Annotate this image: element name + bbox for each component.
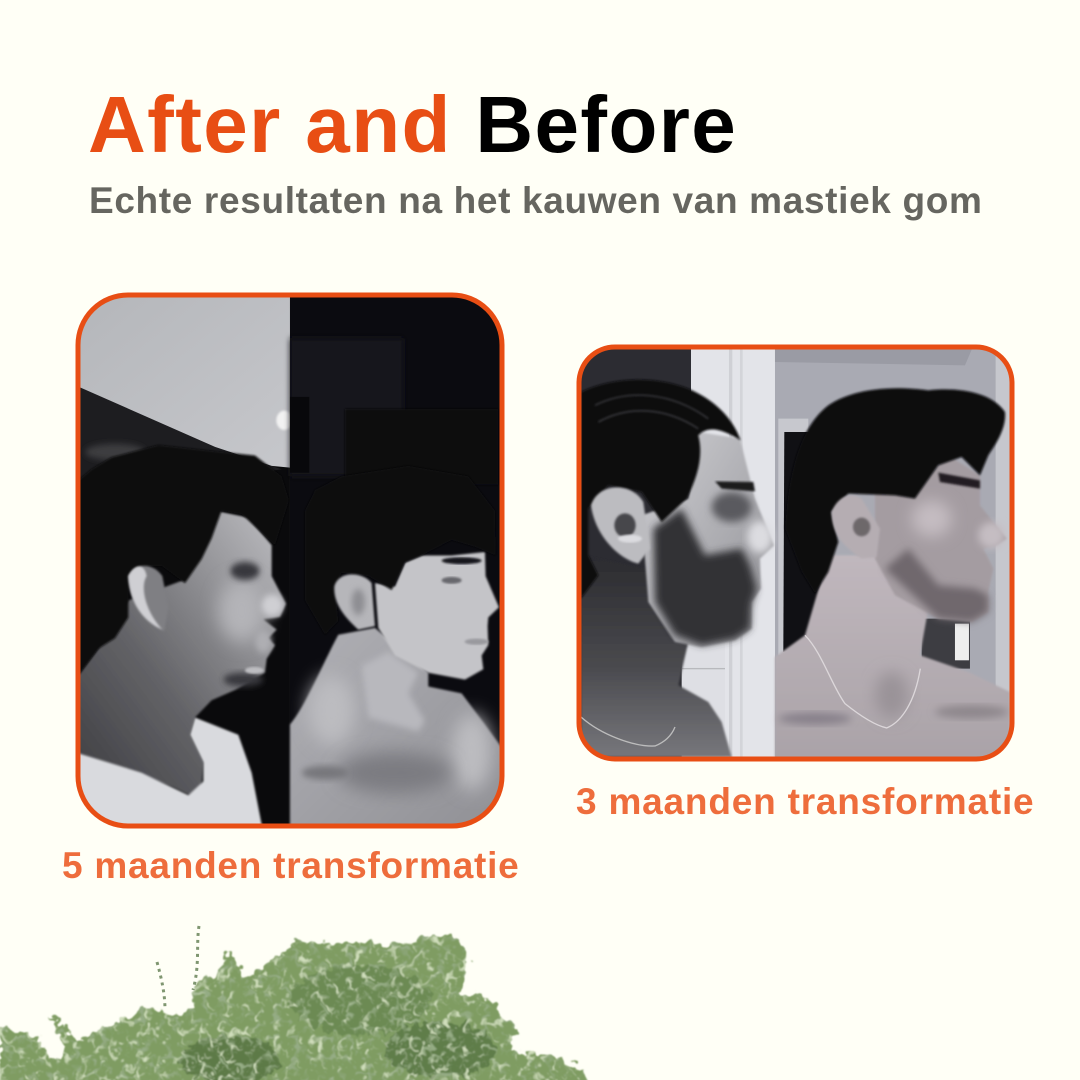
photo panel: 3 months transformation xyxy=(576,344,1014,762)
person A ear xyxy=(591,487,650,564)
left shirt xyxy=(80,716,264,824)
tree sprig xyxy=(157,926,199,1010)
person A face xyxy=(642,432,774,647)
left background xyxy=(575,342,692,762)
illustration: tree top xyxy=(0,926,588,1080)
left hair xyxy=(80,444,275,674)
subtitle: Echte resultaten na het kauwen van mastiek gom xyxy=(89,180,983,221)
person A necklace xyxy=(581,717,675,746)
photo panel: 5 months transformation xyxy=(76,292,504,828)
person A hair xyxy=(581,380,741,599)
caption: 3 months: 3 maanden transformatie xyxy=(576,781,1034,822)
right hair xyxy=(336,476,486,592)
person B ear xyxy=(832,495,880,559)
right background xyxy=(775,350,996,756)
left ear xyxy=(128,566,168,631)
person B body xyxy=(775,555,1010,757)
left skin xyxy=(75,511,286,795)
title: After and Before xyxy=(88,80,737,169)
right body xyxy=(290,628,505,842)
person B necklace xyxy=(805,635,920,728)
person B face xyxy=(875,455,1007,622)
left background xyxy=(75,290,290,842)
person B hair xyxy=(785,388,1005,594)
right face xyxy=(375,552,499,680)
right background xyxy=(290,290,505,842)
person A neck and body xyxy=(582,586,733,756)
right ear xyxy=(334,574,375,630)
caption: 5 months: 5 maanden transformatie xyxy=(62,845,520,886)
